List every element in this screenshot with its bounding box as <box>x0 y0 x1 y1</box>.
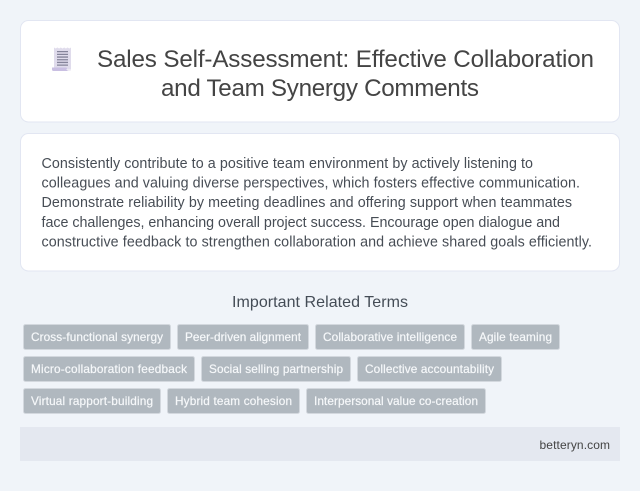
icon: receipt document <box>52 48 71 71</box>
title <box>97 46 594 102</box>
footer source text: betteryn.com <box>540 438 610 452</box>
tag: collaborative intelligence <box>316 324 464 350</box>
tag: hybrid team cohesion: Hybrid team cohesion <box>175 394 292 408</box>
tag: virtual rapport-building <box>24 388 160 414</box>
title: Sales Self-Assessment: Effective Collaboration <box>97 46 594 73</box>
tag: collective accountability: Collective accountability <box>365 362 494 376</box>
tag: micro-collaboration feedback: Micro-collaboration feedback <box>31 362 187 376</box>
tag: collaborative intelligence: Collaborative intelligence <box>323 330 457 344</box>
tag: social selling partnership <box>202 356 350 382</box>
tag: cross-functional synergy: Cross-functional synergy <box>31 330 163 344</box>
panel: title card <box>20 20 620 122</box>
tag: social selling partnership: Social selling partnership <box>209 362 343 376</box>
tag: agile teaming <box>472 324 560 350</box>
tag: collective accountability <box>358 356 502 382</box>
footer bar <box>20 427 620 461</box>
heading: important related terms: Important Related Terms <box>232 294 408 311</box>
description text: colleagues and valuing diverse perspectives, which fosters effective communication. <box>42 176 580 192</box>
tag: peer-driven alignment <box>178 324 308 350</box>
description text: constructive feedback to strengthen collaboration and achieve shared goals efficiently. <box>42 234 592 250</box>
title: and Team Synergy Comments <box>161 75 479 102</box>
panel: description card <box>20 134 620 271</box>
tag: interpersonal value co-creation <box>306 388 486 414</box>
tag group: related terms <box>24 324 560 414</box>
tag: hybrid team cohesion <box>168 388 300 414</box>
description text: Consistently contribute to a positive team environment by actively listening to <box>42 156 533 172</box>
tag: cross-functional synergy <box>24 324 170 350</box>
description text: face challenges, enhancing overall project success. Encourage open dialogue and <box>42 215 560 231</box>
description text: Demonstrate reliability by meeting deadlines and offering support when teammates <box>42 195 572 211</box>
tag: agile teaming: Agile teaming <box>479 330 552 344</box>
tag: peer-driven alignment: Peer-driven alignment <box>185 330 302 344</box>
description text <box>42 156 592 250</box>
tag: micro-collaboration feedback <box>24 356 194 382</box>
tag: interpersonal value co-creation: Interpersonal value co-creation <box>314 394 478 408</box>
tag: virtual rapport-building: Virtual rapport-building <box>31 394 153 408</box>
